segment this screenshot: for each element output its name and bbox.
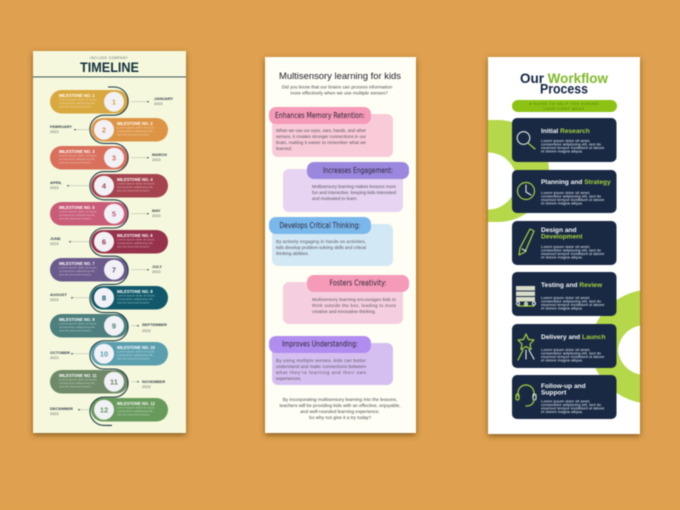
milestone text: MILESTONE NO. 7: [59, 261, 95, 266]
card: memory retention: [269, 107, 393, 157]
card: creativity: Fosters Creativity:: [330, 278, 386, 288]
number circles: 8: [102, 294, 106, 302]
intro text: [282, 84, 393, 96]
card: initial research: Initial Research: [541, 128, 590, 135]
card: testing and review: Lorem ipsum dolor sit amet,: [541, 295, 590, 300]
milestone text: consectetur adipiscing elit,: [59, 213, 95, 217]
milestone text: consectetur adipiscing elit,: [117, 185, 153, 189]
icon: magnifying glass: [517, 132, 535, 149]
date labels: JANUARY: [154, 96, 174, 101]
card: initial research: et dolore magna aliqua.: [541, 148, 583, 154]
card: delivery and launch: et dolore magna aliqua.: [541, 358, 583, 362]
date labels: DECEMBER: [50, 406, 73, 411]
date labels: 2023: [50, 130, 58, 134]
subtitle pill: A GUIDE TO HELP YOU DURING: [529, 102, 599, 106]
date labels: NOVEMBER: [142, 379, 165, 384]
number circles: 2: [102, 126, 106, 134]
date labels: OCTOBER: [50, 350, 70, 355]
intro text: Did you know that our brains can process information: [282, 84, 393, 90]
card: creativity: Multisensory learning encourages kids to: [312, 297, 396, 302]
milestone text: MILESTONE NO. 10: [117, 345, 156, 350]
milestone text: sed do eiusmod tempor: [117, 188, 149, 192]
milestone text: Lorem ipsum dolor sit amet,: [117, 350, 155, 354]
card: planning and strategy: eiusmod tempor incididunt ut labore: [541, 197, 605, 202]
milestone text: consectetur adipiscing elit,: [59, 269, 95, 273]
milestone text: Lorem ipsum dolor sit amet,: [117, 126, 155, 130]
date labels: 2023: [152, 158, 160, 162]
milestone text: Lorem ipsum dolor sit amet,: [59, 98, 97, 102]
milestone text: Lorem ipsum dolor sit amet,: [117, 406, 155, 410]
subtitle pill: YOUR FIRST WEEK: [543, 107, 585, 111]
milestone text: sed do eiusmod tempor: [117, 412, 149, 416]
card: engagement: Multisensory learning makes lessons more: [312, 184, 396, 189]
subtitle pill: [512, 100, 617, 112]
date labels: 2023: [50, 412, 58, 416]
milestone text: MILESTONE NO. 3: [59, 149, 95, 154]
panel: multisensory learning: [265, 57, 416, 433]
title: timeline: TIMELINE: [80, 59, 139, 75]
card: planning and strategy: consectetur adipiscing elit, sed do: [541, 194, 602, 198]
icon: star trophy: [518, 334, 534, 360]
date labels: 2023: [154, 102, 162, 106]
card: memory retention: senses, it creates stronger connections in our: [276, 134, 366, 139]
milestone text: Lorem ipsum dolor sit amet,: [117, 238, 155, 242]
card: delivery and launch: eiusmod tempor incididunt ut labore: [541, 354, 605, 359]
panel: workflow process: [488, 57, 640, 434]
milestone text: sed do eiusmod tempor: [117, 300, 149, 304]
date labels: 2023: [50, 356, 58, 360]
date connectors: [67, 101, 149, 411]
card: initial research: [512, 118, 616, 162]
card: critical thinking: Develops Critical Thinking:: [280, 221, 360, 230]
card: planning and strategy: et dolore magna aliqua.: [541, 200, 583, 206]
number circles: [94, 92, 124, 420]
closing text: So why not give it a try today?: [309, 415, 372, 420]
milestone text: MILESTONE NO. 11: [59, 373, 97, 378]
number circles: 5: [112, 210, 116, 218]
card: testing and review: et dolore magna aliqua.: [541, 306, 583, 310]
card: creativity: creative and innovative thinking.: [312, 309, 376, 314]
card: follow-up and support: et dolore magna aliqua.: [541, 409, 583, 414]
card: design and development: [512, 221, 616, 265]
date labels: 2023: [50, 242, 58, 246]
milestone text: consectetur adipiscing elit,: [117, 129, 153, 133]
date labels: 2023: [50, 298, 58, 302]
date labels: AUGUST: [50, 292, 67, 297]
closing text: and well-rounded learning experience.: [300, 409, 380, 414]
card: follow-up and support: Support: [541, 390, 567, 396]
milestone text: [59, 93, 156, 416]
milestone text: MILESTONE NO. 6: [117, 233, 153, 238]
card: testing and review: consectetur adipiscing elit, sed do: [541, 298, 602, 304]
card: engagement: Increases Engagement:: [323, 166, 393, 175]
milestone text: sed do eiusmod tempor: [59, 104, 91, 108]
milestone text: sed do eiusmod tempor: [59, 384, 91, 388]
date labels: JULY: [152, 264, 162, 269]
milestone text: consectetur adipiscing elit,: [59, 157, 95, 161]
card: delivery and launch: Delivery and Launch: [541, 334, 606, 341]
date labels: [50, 96, 174, 416]
card: understanding: [269, 336, 393, 385]
card: design and development: Design and: [541, 227, 577, 234]
date labels: FEBRUARY: [50, 124, 72, 129]
title: Process: [540, 82, 588, 96]
milestone text: sed do eiusmod tempor: [117, 132, 149, 136]
card: design and development: Lorem ipsum dolor sit amet,: [541, 244, 590, 249]
milestone text: Lorem ipsum dolor sit amet,: [59, 322, 97, 326]
milestone text: MILESTONE NO. 4: [117, 177, 153, 182]
milestone pills: [50, 90, 168, 422]
milestone text: consectetur adipiscing elit,: [59, 325, 95, 329]
milestone text: consectetur adipiscing elit,: [117, 241, 153, 245]
card: follow-up and support: consectetur adipiscing elit, sed do: [541, 402, 602, 407]
card: understanding: experiences.: [276, 376, 302, 381]
title: [520, 71, 608, 96]
date labels: 2023: [142, 385, 150, 389]
card: creativity: think outside the box, leading to more: [312, 303, 396, 308]
intro text: more effectively when we use multiple senses?: [290, 90, 388, 96]
icon: headset: [516, 385, 536, 406]
card: understanding: what they're learning and their own: [276, 370, 366, 375]
milestone text: consectetur adipiscing elit,: [59, 101, 95, 105]
card: follow-up and support: eiusmod tempor incididunt ut labore: [541, 406, 605, 410]
milestone text: Lorem ipsum dolor sit amet,: [59, 266, 97, 270]
date labels: 2023: [152, 214, 160, 218]
card: critical thinking: thinking abilities.: [276, 251, 309, 256]
card: design and development: et dolore magna aliqua.: [541, 254, 583, 260]
icon: server network: [516, 286, 536, 306]
card: delivery and launch: [512, 324, 616, 368]
number circles: 11: [110, 378, 118, 386]
milestone text: sed do eiusmod tempor: [117, 244, 149, 248]
decorative green rings: [488, 120, 640, 402]
company label: INCLUDE COMPANY: [90, 56, 128, 60]
milestone text: MILESTONE NO. 8: [117, 289, 153, 294]
icon: pencil: [519, 229, 534, 255]
number circles: 9: [112, 322, 116, 330]
card: testing and review: Testing and Review: [541, 282, 603, 289]
closing text: [279, 397, 401, 420]
card: planning and strategy: Lorem ipsum dolor sit amet,: [541, 190, 590, 195]
milestone text: sed do eiusmod tempor: [59, 216, 91, 220]
number circles: 1: [112, 98, 116, 106]
number circles: 7: [112, 266, 116, 274]
card: initial research: Lorem ipsum dolor sit amet,: [541, 138, 590, 143]
card: design and development: consectetur adipiscing elit, sed do: [541, 248, 602, 252]
card: follow-up and support: Lorem ipsum dolor sit amet,: [541, 398, 590, 404]
card: understanding: Improves Understanding:: [282, 340, 358, 348]
date labels: MARCH: [152, 152, 167, 157]
milestone text: MILESTONE NO. 9: [59, 317, 95, 322]
closing text: By incorporating multisensory learning into the lessons,: [283, 397, 397, 402]
card: delivery and launch: consectetur adipiscing elit, sed do: [541, 350, 602, 356]
card: creativity: [283, 275, 409, 324]
date labels: 2023: [50, 186, 58, 190]
date labels: 2023: [142, 329, 150, 333]
number circles: 10: [100, 350, 108, 358]
card: planning and strategy: Planning and Strategy: [541, 179, 611, 186]
number circles: 12: [100, 406, 108, 414]
card: design and development: eiusmod tempor incididunt ut labore: [541, 251, 605, 256]
number circles: 6: [102, 238, 106, 246]
card: testing and review: eiusmod tempor incididunt ut labore: [541, 302, 605, 307]
card: engagement: and motivated to learn.: [312, 196, 358, 201]
card: initial research: eiusmod tempor incididunt ut labore: [541, 145, 605, 150]
heading: Multisensory learning for kids: [279, 71, 402, 81]
milestone text: Lorem ipsum dolor sit amet,: [59, 378, 97, 382]
milestone text: Lorem ipsum dolor sit amet,: [59, 154, 97, 158]
title: Our Workflow: [520, 71, 608, 86]
milestone text: Lorem ipsum dolor sit amet,: [59, 210, 97, 214]
milestone text: MILESTONE NO. 1: [59, 93, 95, 98]
card: planning and strategy: [512, 170, 616, 213]
date labels: 2023: [152, 270, 160, 274]
number circles: 4: [102, 182, 107, 190]
milestone text: sed do eiusmod tempor: [117, 356, 149, 360]
card: critical thinking: [269, 217, 393, 266]
card: critical thinking: By actively engaging in hands-on activities,: [276, 239, 366, 244]
card: delivery and launch: Lorem ipsum dolor sit amet,: [541, 347, 590, 352]
milestone text: consectetur adipiscing elit,: [117, 409, 153, 413]
panel: timeline: [33, 51, 186, 433]
card: memory retention: learned.: [276, 146, 292, 151]
milestone text: sed do eiusmod tempor: [59, 328, 91, 332]
milestone text: consectetur adipiscing elit,: [59, 381, 95, 385]
milestone text: MILESTONE NO. 5: [59, 205, 95, 210]
card: engagement: [283, 162, 409, 212]
winding line: [90, 87, 128, 425]
card: engagement: fun and interactive, keeping kids interested: [312, 190, 396, 195]
milestone text: MILESTONE NO. 12: [117, 401, 156, 406]
date labels: SEPTEMBER: [142, 322, 167, 327]
milestone text: consectetur adipiscing elit,: [117, 297, 153, 301]
date labels: APRIL: [50, 180, 63, 185]
card: critical thinking: kids develop problem-solving skills and critical: [276, 245, 366, 250]
date labels: JUNE: [50, 236, 61, 241]
card: follow-up and support: [512, 375, 616, 419]
card: testing and review: [512, 272, 616, 316]
card: design and development: Development: [541, 234, 583, 240]
card: understanding: understand and make connections between: [276, 364, 366, 369]
milestone text: MILESTONE NO. 2: [117, 121, 153, 126]
milestone text: sed do eiusmod tempor: [59, 272, 91, 276]
icon: clock: [518, 182, 534, 200]
milestone text: consectetur adipiscing elit,: [117, 353, 153, 357]
number circles: 3: [112, 154, 116, 162]
closing text: teachers will be providing kids with an effective, enjoyable,: [279, 403, 401, 408]
card: memory retention: When we use our eyes, ears, hands, and other: [276, 128, 366, 133]
milestone text: Lorem ipsum dolor sit amet,: [117, 182, 155, 186]
date labels: MAY: [152, 208, 161, 213]
card: memory retention: brain, making it easier to remember what we: [276, 140, 366, 145]
milestone text: Lorem ipsum dolor sit amet,: [117, 294, 155, 298]
card: follow-up and support: Follow-up and: [541, 383, 586, 390]
milestone text: sed do eiusmod tempor: [59, 160, 91, 164]
card: memory retention: Enhances Memory Retention:: [275, 111, 365, 120]
card: understanding: By using multiple senses, kids can better: [276, 358, 366, 363]
card: initial research: consectetur adipiscing elit, sed do: [541, 142, 602, 146]
